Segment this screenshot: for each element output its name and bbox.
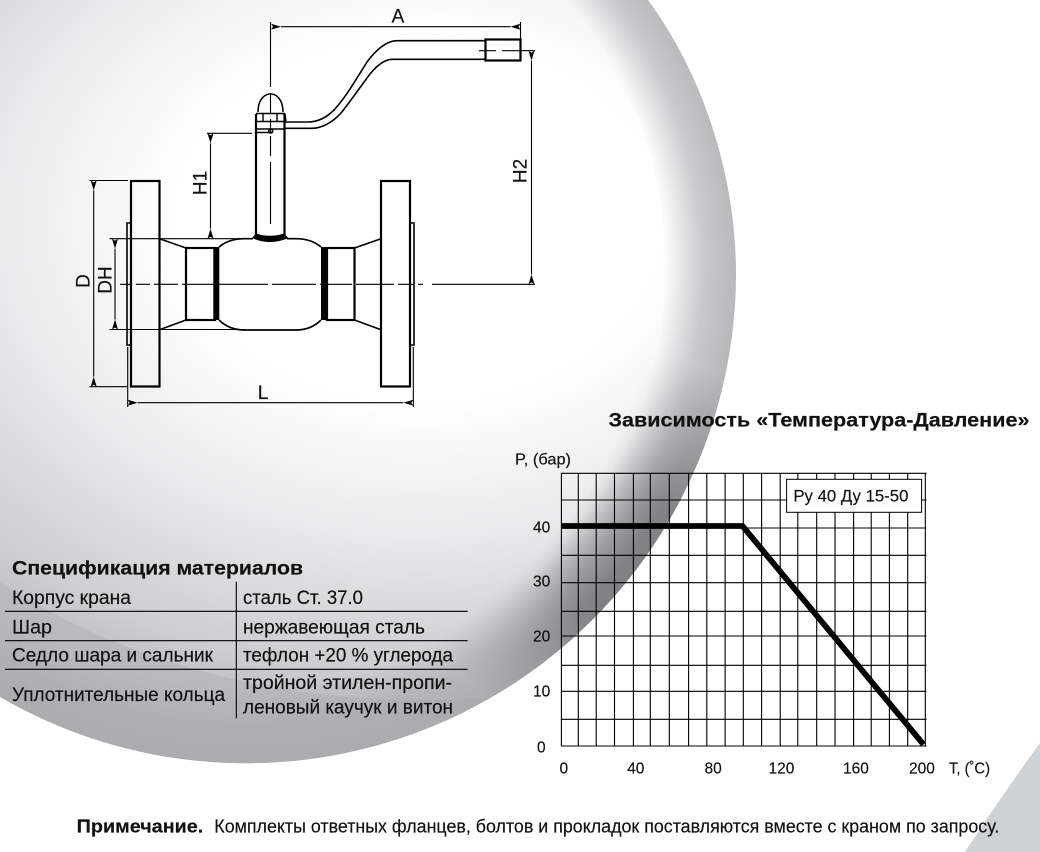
row: seat	[12, 646, 453, 667]
dimension labels: A	[392, 6, 405, 28]
row: ball: нержавеющая сталь	[243, 617, 425, 638]
x axis labels	[560, 760, 935, 777]
x axis labels: 80	[704, 760, 722, 777]
dimension H2	[530, 61, 532, 274]
y axis title: P, (бар)	[515, 451, 571, 468]
centre lines	[120, 22, 535, 284]
row: body: сталь Ст. 37.0	[243, 588, 363, 609]
dimension H1	[110, 133, 252, 330]
valve technical drawing	[90, 22, 535, 407]
dimension labels	[74, 6, 532, 404]
row: seat: тефлон +20 % углерода	[243, 646, 453, 667]
background sphere	[0, 0, 736, 763]
right flange	[381, 181, 414, 386]
table rules	[5, 582, 468, 718]
x axis labels: 40	[627, 760, 645, 777]
stem cap and nut	[256, 94, 286, 133]
dimension labels: D	[74, 274, 94, 288]
dimension D	[90, 180, 128, 387]
chart heading: Зависимость «Температура-Давление»	[608, 410, 1030, 432]
grid	[561, 473, 926, 746]
corner shape bottom right	[965, 743, 1040, 852]
dimension labels: H2	[510, 159, 532, 183]
temperature-pressure chart	[515, 451, 990, 777]
pressure curve	[561, 526, 924, 744]
heading: materials specification: Спецификация материалов	[12, 558, 303, 579]
y axis labels: 10	[533, 684, 551, 701]
x axis labels: 160	[843, 760, 869, 777]
y axis labels: 20	[533, 629, 551, 646]
dimension A	[281, 22, 520, 39]
right neck	[327, 239, 381, 330]
footnote: Комплекты ответных фланцев, болтов и прокладок поставляются вместе с краном по запросу.	[214, 816, 999, 836]
ball body	[219, 239, 321, 330]
dimension labels: DH	[96, 266, 116, 294]
row: ball	[12, 617, 425, 638]
row: seals	[12, 673, 453, 718]
row: body: Корпус крана	[12, 588, 131, 609]
y axis labels: 30	[533, 574, 551, 591]
dimension L	[128, 347, 413, 407]
row: ball: Шар	[12, 617, 52, 638]
row: seals: Уплотнительные кольца	[12, 685, 225, 706]
x axis labels: 200	[909, 760, 935, 777]
row: body	[12, 588, 363, 609]
x axis labels: 120	[768, 760, 795, 777]
row: seals: леновый каучук и витон	[243, 697, 453, 718]
handle grip	[486, 40, 520, 60]
y axis labels: 0	[537, 740, 546, 757]
handle	[284, 41, 485, 128]
dimension labels: L	[258, 383, 268, 404]
left neck	[160, 239, 215, 330]
footnote: Примечание.	[77, 816, 203, 836]
dimension DH	[114, 249, 116, 320]
x axis title: T, (˚C)	[949, 760, 990, 777]
row: seat: Седло шара и сальник	[12, 646, 214, 667]
y axis labels	[533, 520, 551, 757]
x axis labels: 0	[560, 760, 568, 777]
left flange	[127, 181, 160, 386]
stem	[256, 114, 284, 235]
dimension labels: H1	[190, 171, 212, 195]
row: seals: тройной этилен-пропи-	[243, 673, 452, 694]
welds	[213, 234, 327, 320]
materials table	[5, 582, 468, 718]
y axis labels: 40	[533, 520, 551, 537]
legend box: Ру 40 Ду 15-50	[793, 488, 908, 506]
legend box	[787, 479, 922, 512]
